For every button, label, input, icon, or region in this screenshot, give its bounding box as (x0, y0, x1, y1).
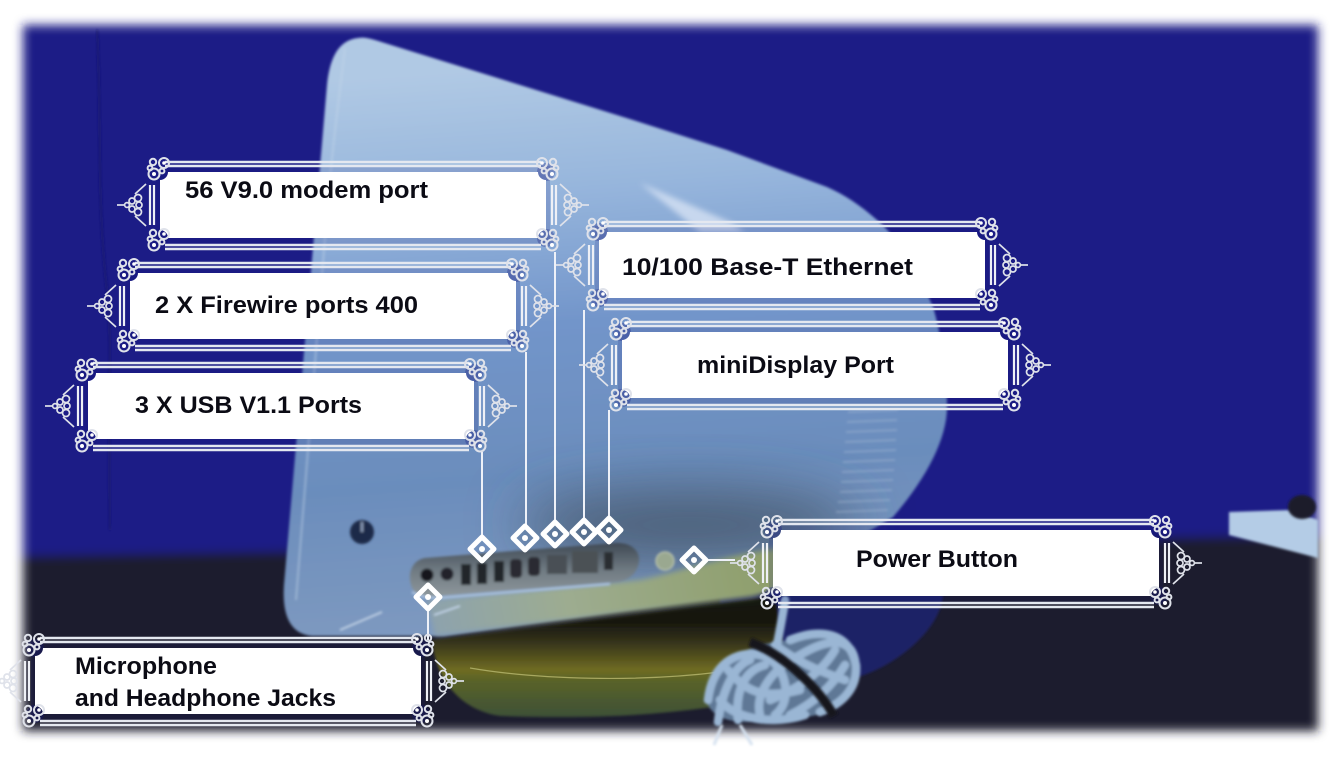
screw on body (350, 520, 374, 544)
modem and ethernet ports (547, 555, 567, 574)
FireWire ports (510, 559, 522, 578)
curtain folds (97, 30, 110, 530)
label: 10/100 Base-T Ethernet: 10/100 Base-T Ethernet (622, 254, 913, 281)
USB ports (461, 564, 471, 585)
label: Power Button: Power Button (856, 546, 1018, 573)
darker lower right of the body (520, 490, 860, 560)
port panel (410, 543, 674, 598)
label: Power Button (730, 516, 1202, 608)
label: 10/100 Base-T Ethernet (556, 218, 1028, 310)
mini display port (604, 552, 613, 570)
label: 56 V9.0 modem port: 56 V9.0 modem port (185, 177, 428, 204)
label: miniDisplay Port: miniDisplay Port (697, 352, 894, 379)
marker: microphone jacks (416, 585, 440, 609)
label: 2 X Firewire ports 400 (87, 259, 559, 352)
computer body (284, 38, 947, 636)
label: Microphone and Headphone Jacks: Microphone (75, 653, 217, 680)
light reflection streak (640, 183, 745, 232)
label: 3 X USB V1.1 Ports: 3 X USB V1.1 Ports (135, 392, 362, 419)
audio jacks (420, 568, 434, 582)
marker: FireWire (513, 526, 537, 550)
cable bundle (706, 600, 858, 722)
label: Microphone and Headphone Jacks: and Headphone Jacks (75, 685, 336, 712)
table (23, 535, 1318, 731)
green lower lip (426, 548, 782, 636)
marker: ethernet (572, 520, 596, 544)
label: 2 X Firewire ports 400: 2 X Firewire ports 400 (155, 292, 418, 319)
label: miniDisplay Port (579, 318, 1051, 410)
marker: USB (470, 537, 494, 561)
scratch marks on the lower body (340, 606, 460, 630)
vent grille (836, 410, 898, 512)
bundle fill (706, 634, 858, 722)
marker: modem (543, 522, 567, 546)
cable tail (714, 725, 752, 745)
power strip (1229, 510, 1318, 558)
label: Microphone and Headphone Jacks (0, 634, 464, 726)
label: 3 X USB V1.1 Ports (45, 359, 517, 452)
marker: power button (682, 548, 706, 572)
label: 56 V9.0 modem port (117, 158, 589, 250)
base foot (432, 596, 790, 717)
marker: mini display (597, 518, 621, 542)
connector lines (428, 252, 735, 640)
left edge highlight (296, 48, 345, 600)
cable tie (750, 642, 834, 716)
translucent base disc (720, 590, 943, 700)
